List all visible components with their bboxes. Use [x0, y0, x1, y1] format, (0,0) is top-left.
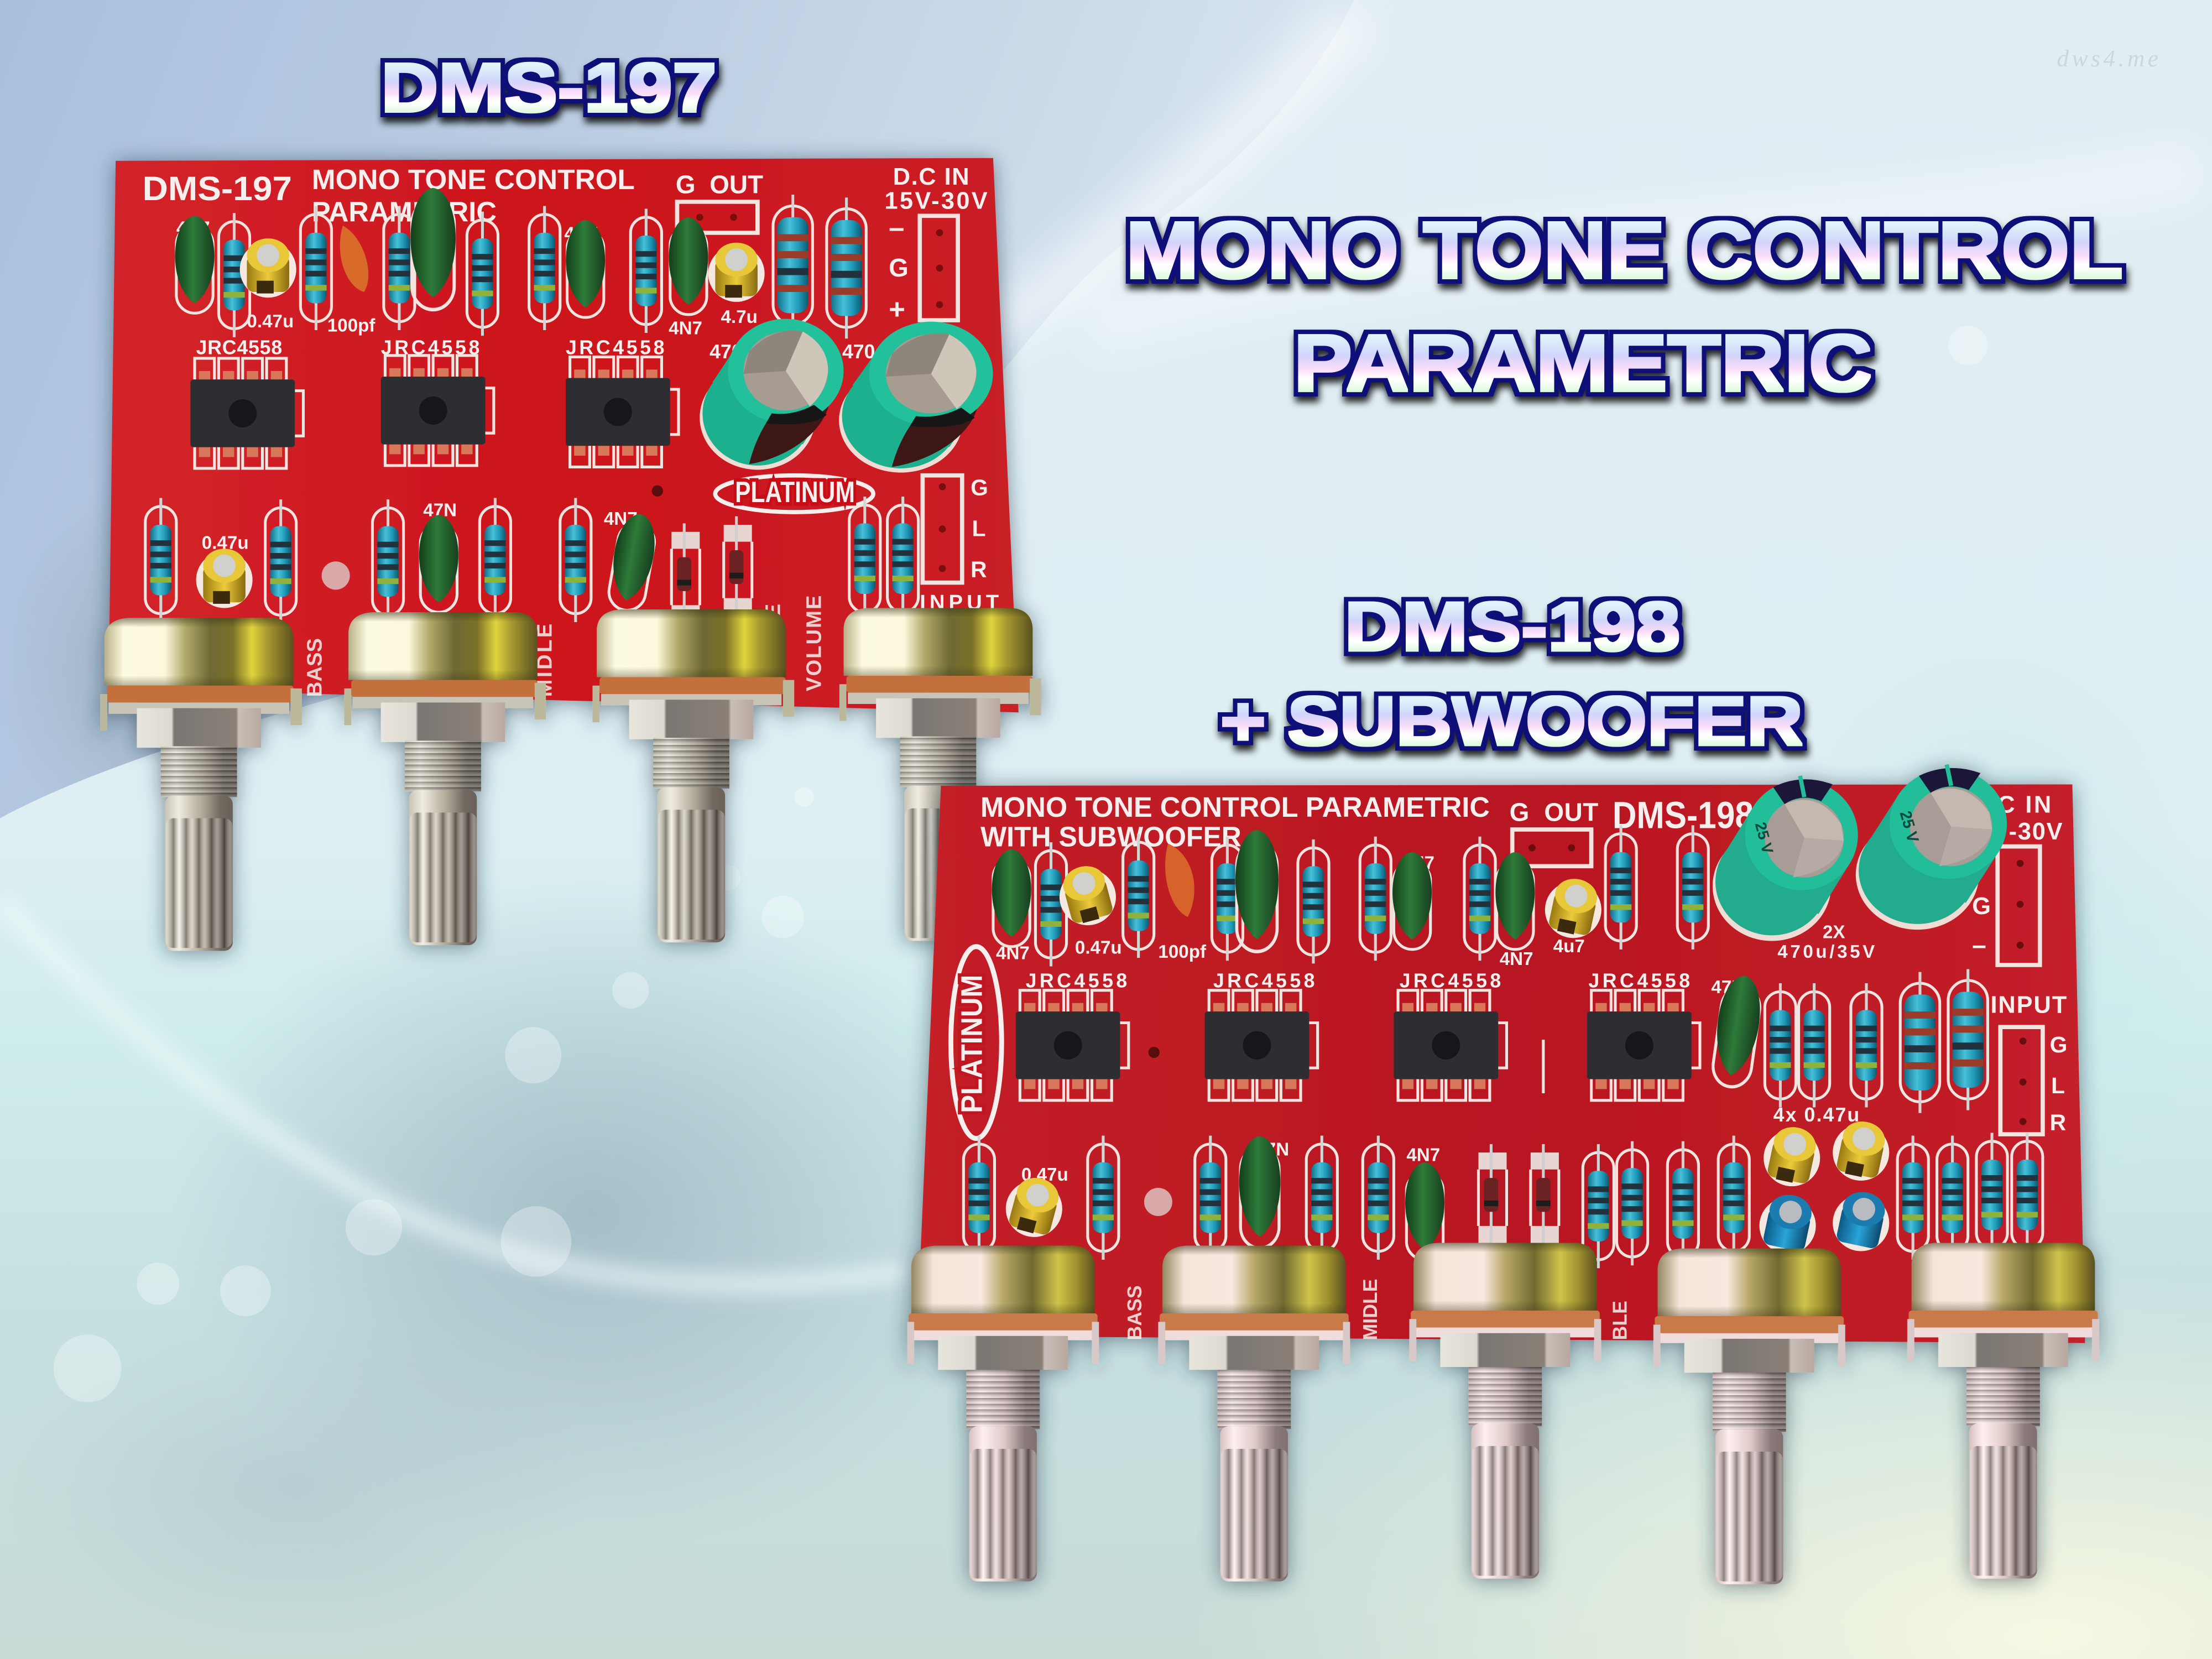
diodes 1: [671, 517, 752, 622]
silkscreen text 1: G: [889, 253, 909, 282]
silkscreen text 2: G: [1972, 893, 1991, 920]
silkscreen text 2: 47N: [1711, 977, 1745, 998]
silkscreen text 1: JRC4558: [196, 336, 282, 358]
silkscreen text 1: –: [889, 212, 905, 243]
silkscreen text 2: 470u/35V: [1777, 942, 1875, 962]
potentiometers 1: [100, 608, 1041, 951]
silkscreen text 1: BASS: [303, 638, 327, 697]
silkscreen text 2: JRC4558: [1588, 970, 1690, 992]
platinum logo 2: PLATINUM: [956, 975, 989, 1113]
connectors 2: [1512, 830, 2043, 1134]
film capacitors 1: [175, 188, 708, 613]
silkscreen text 2: BASS: [1124, 1285, 1146, 1340]
mounting holes 1: [322, 486, 663, 589]
silkscreen text 1: L: [972, 515, 986, 541]
heading: + SUBWOOFER: + SUBWOOFER: [1220, 683, 1803, 760]
silkscreen text 2: 4N7: [1500, 949, 1533, 969]
ICs 2: [1016, 990, 1700, 1100]
silkscreen text 2: 4x 0.47u: [1773, 1104, 1859, 1126]
silkscreen text 2: G OUT: [1510, 798, 1598, 827]
silkscreen text 1: R: [971, 556, 987, 582]
ICs 1: [190, 356, 679, 468]
silkscreen text 1: 470: [709, 341, 743, 363]
resistors 1: [145, 195, 919, 624]
silkscreen text 1: [143, 164, 999, 697]
silkscreen text 1: PARAMETRIC: [312, 196, 497, 228]
watermark: dws4.me: [2057, 45, 2158, 72]
silkscreen text 1: JRC4558: [381, 336, 479, 358]
silkscreen text 1: G: [971, 474, 988, 500]
silkscreen text 2: MONO TONE CONTROL PARAMETRIC: [980, 791, 1490, 823]
silkscreen text 1: DMS-197: [143, 170, 292, 207]
silkscreen text 1: 0.47u: [247, 311, 294, 332]
silkscreen text 2: JRC4558: [1400, 970, 1501, 992]
silkscreen text 1: VOLUME: [802, 596, 826, 691]
silkscreen text 2: L: [2051, 1073, 2065, 1098]
large capacitors 2: [1713, 765, 2007, 941]
silkscreen text 2: 47N: [1255, 1139, 1289, 1160]
silkscreen text 2: G: [2050, 1032, 2067, 1057]
silkscreen text 2: 0.47u: [1075, 937, 1122, 958]
board: DMS-197: [100, 158, 1041, 951]
silkscreen text 1: MONO TONE CONTROL: [312, 164, 635, 195]
silkscreen text 1: 100pf: [327, 315, 375, 336]
pcb 1: [108, 158, 1019, 712]
silkscreen text 2: C IN: [1997, 791, 2051, 818]
silkscreen text 2: DMS-198: [1613, 794, 1754, 836]
silkscreen text 2: 4u7: [1553, 936, 1585, 957]
resistors 2: [963, 825, 2043, 1268]
bokeh lights: [54, 326, 1987, 1402]
silkscreen text 2: BLE: [1609, 1301, 1631, 1340]
silkscreen text 2: 0.47u: [1021, 1165, 1068, 1185]
mounting holes 2: [1144, 1047, 1172, 1216]
diodes 2: [1478, 1144, 1559, 1243]
silkscreen text 1: G OUT: [676, 170, 763, 199]
heading: DMS-198: DMS-198: [1344, 588, 1680, 665]
board: DMS-198: [907, 765, 2099, 1584]
title: PARAMETRIC: PARAMETRIC: [1293, 318, 1872, 408]
silkscreen text 1: 4N7: [669, 319, 702, 339]
connectors 1: [677, 202, 962, 583]
silkscreen text 2: JRC4558: [1026, 970, 1127, 992]
silkscreen text 2: –: [1972, 930, 1986, 959]
silkscreen text 1: E: [761, 604, 785, 618]
silkscreen text 1: INPUT: [920, 591, 999, 614]
silkscreen text 2: 4N7: [996, 943, 1030, 964]
heading: DMS-197: DMS-197: [381, 50, 717, 127]
film capacitors 2: [992, 830, 1765, 1260]
silkscreen text 1: 4.7u: [721, 307, 758, 327]
silkscreen text 2: INPUT: [1990, 992, 2067, 1019]
silkscreen text 2: WITH SUBWOOFER: [980, 821, 1241, 853]
silkscreen text 2: 100pf: [1158, 942, 1207, 962]
silkscreen text 1: 47N: [423, 500, 457, 521]
silkscreen text 1: +: [889, 294, 905, 325]
potentiometers 2: [907, 1243, 2099, 1584]
silkscreen text 2: [980, 791, 2067, 1340]
electrolytic capacitors 2: [999, 860, 1895, 1259]
platinum logo 2: [951, 947, 1001, 1139]
silkscreen text 1: 470: [842, 341, 875, 363]
silkscreen text 2: MIDLE: [1359, 1279, 1381, 1340]
silkscreen text 2: 4N7: [1401, 853, 1434, 873]
silkscreen text 2: JRC4558: [1213, 970, 1315, 992]
silkscreen text 1: MIDLE: [533, 624, 556, 697]
title: MONO TONE CONTROL: MONO TONE CONTROL: [1126, 205, 2123, 295]
silkscreen text 1: D.C IN: [893, 164, 969, 190]
silkscreen text 2: -30V: [2009, 818, 2063, 845]
silkscreen text 1: 0.47u: [202, 533, 249, 553]
silkscreen text 1: 4N7: [604, 509, 638, 529]
silkscreen text 2: 2X: [1823, 922, 1845, 942]
silkscreen text 1: JRC4558: [566, 336, 665, 358]
electrolytic capacitors 1: [196, 238, 765, 608]
silkscreen text 2: R: [2050, 1109, 2066, 1135]
pcb 2: [917, 784, 2085, 1343]
silkscreen text 2: 4N7: [1406, 1145, 1440, 1165]
silkscreen text 1: 4N7: [176, 218, 210, 238]
silkscreen text 1: 15V-30V: [884, 188, 988, 215]
platinum logo 1: PLATINUM: [735, 476, 855, 509]
large capacitors 1: [700, 319, 993, 473]
silkscreen text 1: 4N7: [564, 224, 598, 244]
